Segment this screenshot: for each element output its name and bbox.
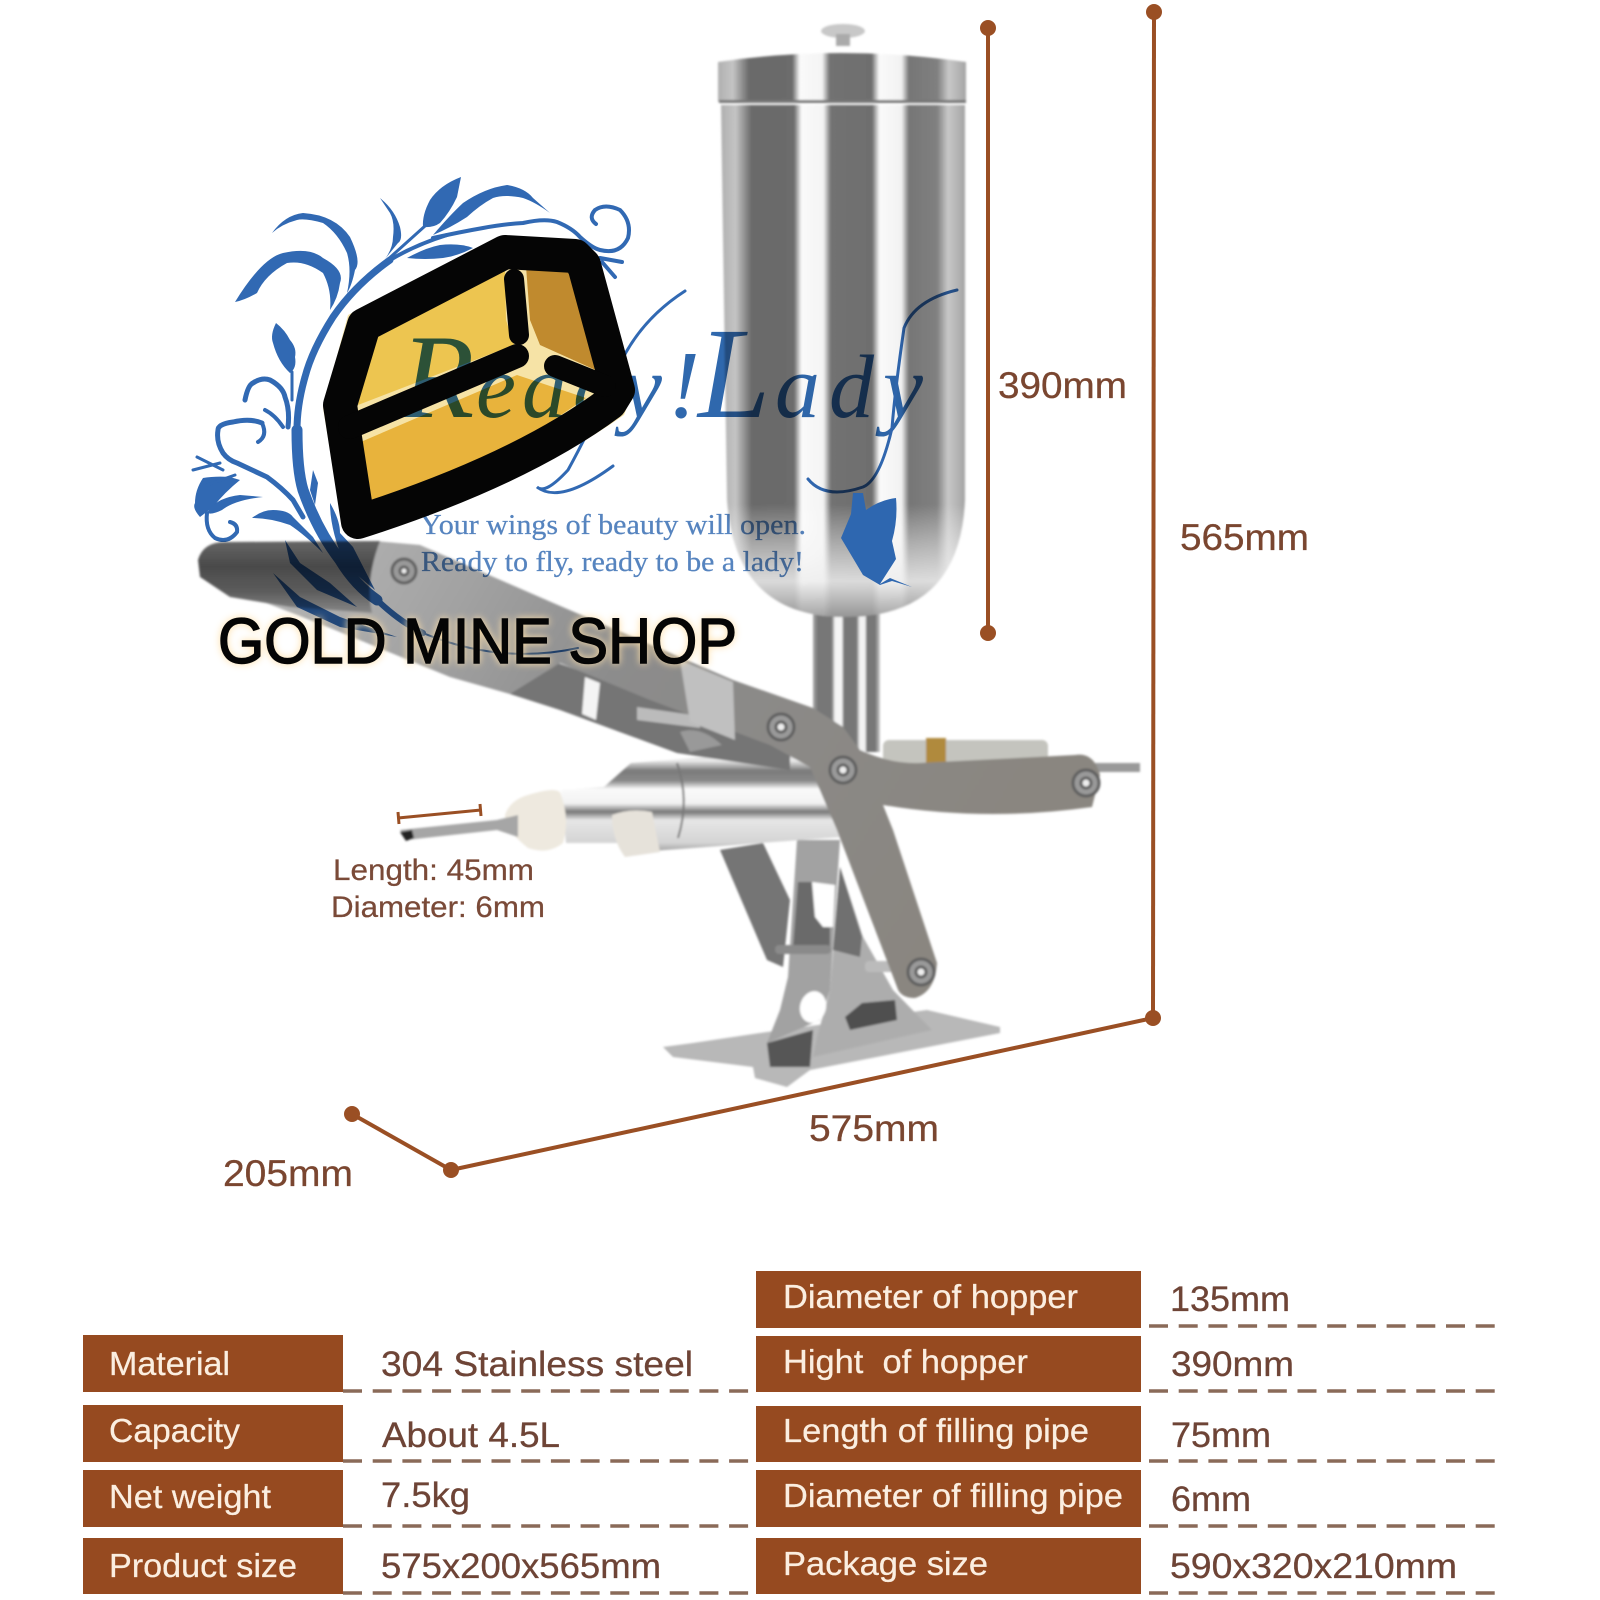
dimension: hopper height [980, 20, 1127, 641]
row: capacity [83, 1405, 750, 1462]
row: product size: 575x200x565mm [381, 1547, 661, 1586]
watermark: Ready!Lady [193, 177, 957, 654]
nozzle measurement [331, 804, 545, 924]
row: length of filling pipe: Length of filling pipe [783, 1412, 1089, 1449]
tagline [420, 510, 806, 578]
row: net weight: 7.5kg [381, 1476, 470, 1515]
row: product size [83, 1538, 750, 1594]
row: capacity: About 4.5L [382, 1416, 560, 1455]
rear cylinder [883, 738, 1140, 774]
row: hight of hopper: 390mm [1171, 1345, 1294, 1384]
row: material [83, 1335, 750, 1392]
row: diameter of hopper: 135mm [1170, 1280, 1290, 1319]
product photo: filling machine [198, 24, 1140, 1087]
outer plate [200, 541, 1100, 998]
row: diameter of filling pipe: 6mm [1171, 1480, 1251, 1519]
shop name: GOLD MINE SHOP [218, 605, 737, 677]
script wordmark: ead [476, 338, 624, 437]
spec table: right column [756, 1271, 1496, 1594]
hopper stem [813, 612, 880, 752]
nozzle measurement: Diameter: 6mm [331, 891, 545, 924]
row: material: 304 Stainless steel [381, 1345, 693, 1384]
base plate [663, 1010, 1000, 1087]
hopper body [721, 105, 965, 617]
script wordmark: ! [668, 331, 700, 438]
gold block logo outline [340, 252, 618, 522]
row: material: Material [109, 1345, 230, 1382]
row: package size: Package size [783, 1545, 988, 1582]
row: diameter of hopper: Diameter of hopper [783, 1278, 1078, 1315]
hand grip [198, 541, 380, 613]
script wordmark: ady [775, 338, 932, 437]
script flourishes [537, 290, 957, 493]
row: capacity: Capacity [109, 1412, 241, 1449]
script wordmark: R [400, 310, 474, 443]
row: diameter of filling pipe [756, 1470, 1496, 1527]
main cylinder and nozzle [400, 750, 842, 857]
lever arm [198, 541, 1100, 998]
back strut [720, 843, 790, 967]
dimension: length [443, 1018, 1153, 1178]
row: diameter of filling pipe: Diameter of filling pipe [783, 1477, 1123, 1514]
nozzle measurement: Length: 45mm [333, 854, 534, 887]
row: package size [756, 1538, 1496, 1594]
dimension: width: 205mm [223, 1153, 353, 1194]
row: diameter of hopper [756, 1271, 1496, 1328]
row: length of filling pipe [756, 1406, 1496, 1462]
gold block logo fill [323, 236, 634, 538]
hopper lid [718, 24, 966, 103]
row: net weight: Net weight [109, 1478, 271, 1515]
row: package size: 590x320x210mm [1170, 1547, 1457, 1586]
tagline: Ready to fly, ready to be a lady! [421, 547, 804, 578]
row: product size: Product size [109, 1547, 297, 1584]
floral swirl [193, 177, 629, 654]
row: net weight [83, 1470, 750, 1527]
dimension: length: 575mm [809, 1108, 939, 1149]
row: hight of hopper [756, 1336, 1496, 1392]
row: length of filling pipe: 75mm [1171, 1416, 1271, 1455]
tagline: Your wings of beauty will open. [420, 510, 806, 541]
upright bracket [767, 840, 932, 1067]
dimension: total height: 565mm [1180, 517, 1309, 558]
pivot bolts [392, 559, 1099, 985]
dimension: width [223, 1106, 451, 1194]
script wordmark: L [696, 302, 770, 446]
script wordmark: y [614, 338, 662, 437]
inner plate [510, 650, 790, 770]
butterfly [841, 493, 912, 587]
spec table: left column [83, 1335, 750, 1594]
dimension: hopper height: 390mm [998, 365, 1127, 406]
row: hight of hopper: Hight of hopper [783, 1343, 1028, 1380]
dimension: total height [1145, 4, 1309, 1026]
